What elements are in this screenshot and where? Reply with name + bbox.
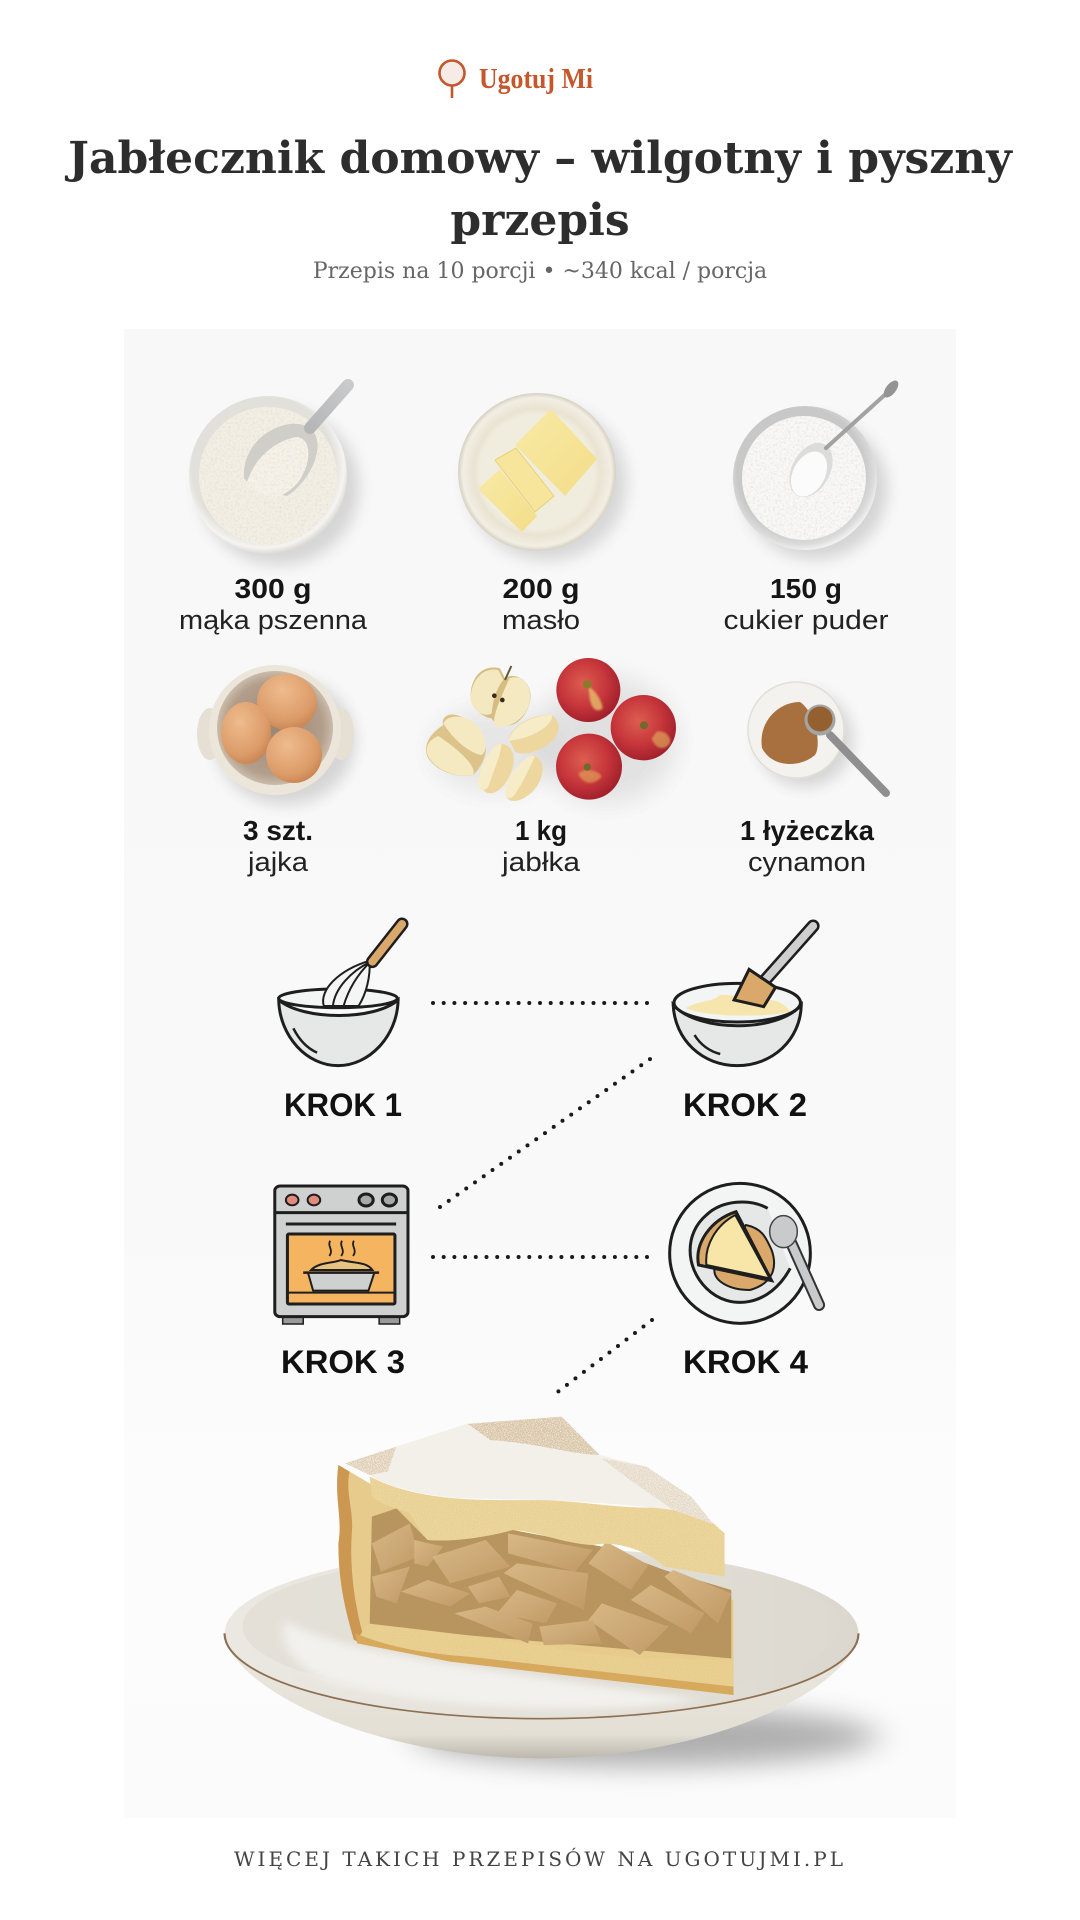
- plate: [225, 1548, 858, 1758]
- label: step 1: KROK 1: [284, 1087, 402, 1123]
- top crust: [370, 1477, 725, 1577]
- label: cinnamon: cynamon: [748, 847, 866, 877]
- label: eggs: [243, 815, 313, 877]
- label: butter: 200 g: [502, 573, 580, 604]
- label: step 3: KROK 3: [281, 1344, 405, 1380]
- ingredient: apples: [426, 658, 677, 803]
- label: flour: 300 g: [234, 573, 312, 604]
- panel: recipe illustration: [179, 379, 899, 1786]
- plate shadow: [414, 1707, 879, 1767]
- apple half: top: [471, 666, 531, 727]
- label: butter: [502, 573, 580, 635]
- ingredient: butter plate: [458, 393, 627, 561]
- apple half: left: [426, 714, 486, 776]
- pie filling: [370, 1508, 731, 1658]
- icon: step 2 spatula bowl: [673, 926, 813, 1066]
- label: flour: mąka pszenna: [179, 605, 368, 635]
- label: sugar: [724, 573, 888, 635]
- title: [64, 133, 1013, 246]
- red apples: [556, 658, 676, 800]
- label: sugar: cukier puder: [724, 605, 888, 635]
- ingredient: powdered sugar bowl: [733, 378, 901, 559]
- label: step 4: KROK 4: [683, 1344, 808, 1380]
- label: step 2: KROK 2: [683, 1087, 807, 1123]
- step labels: [281, 1087, 808, 1380]
- title: Jabłecznik domowy – wilgotny i pyszny: [68, 133, 1012, 184]
- label: butter: masło: [502, 605, 580, 635]
- icon: spoon logo: [440, 60, 464, 98]
- label: flour: [179, 573, 368, 635]
- step connector dots: [433, 1003, 653, 1394]
- label: eggs: 3 szt.: [243, 815, 313, 846]
- title: przepis: [450, 195, 630, 246]
- label: apples: 1 kg: [515, 815, 567, 846]
- label: cinnamon: 1 łyżeczka: [740, 815, 874, 846]
- label: apples: jabłka: [501, 847, 581, 877]
- footer: WIĘCEJ TAKICH PRZEPISÓW NA UGOTUJMI.PL: [234, 1847, 846, 1871]
- steps icons: [275, 924, 819, 1324]
- apple pie slice on plate: [225, 1417, 879, 1767]
- label: apples: [501, 815, 581, 877]
- label: sugar: 150 g: [770, 573, 842, 604]
- subtitle: Przepis na 10 porcji • ~340 kcal / porcja: [313, 259, 767, 284]
- ingredient labels: [179, 573, 888, 877]
- ingredient: flour bowl: [189, 385, 359, 565]
- apple wedges: [478, 715, 559, 801]
- icon: step 1 whisk bowl: [279, 924, 402, 1066]
- label: eggs: jajka: [247, 847, 309, 877]
- pie crust back and side: [337, 1465, 733, 1695]
- logo: [438, 59, 593, 98]
- ingredient: cinnamon plate: [748, 682, 886, 793]
- powdered sugar top: [345, 1417, 713, 1524]
- icon: step 3 oven: [275, 1186, 408, 1324]
- label: cinnamon: [740, 815, 874, 877]
- icon: step 4 pie on plate: [670, 1183, 819, 1323]
- ingredient: eggs bowl: [197, 665, 355, 805]
- bottom crust: [355, 1623, 733, 1695]
